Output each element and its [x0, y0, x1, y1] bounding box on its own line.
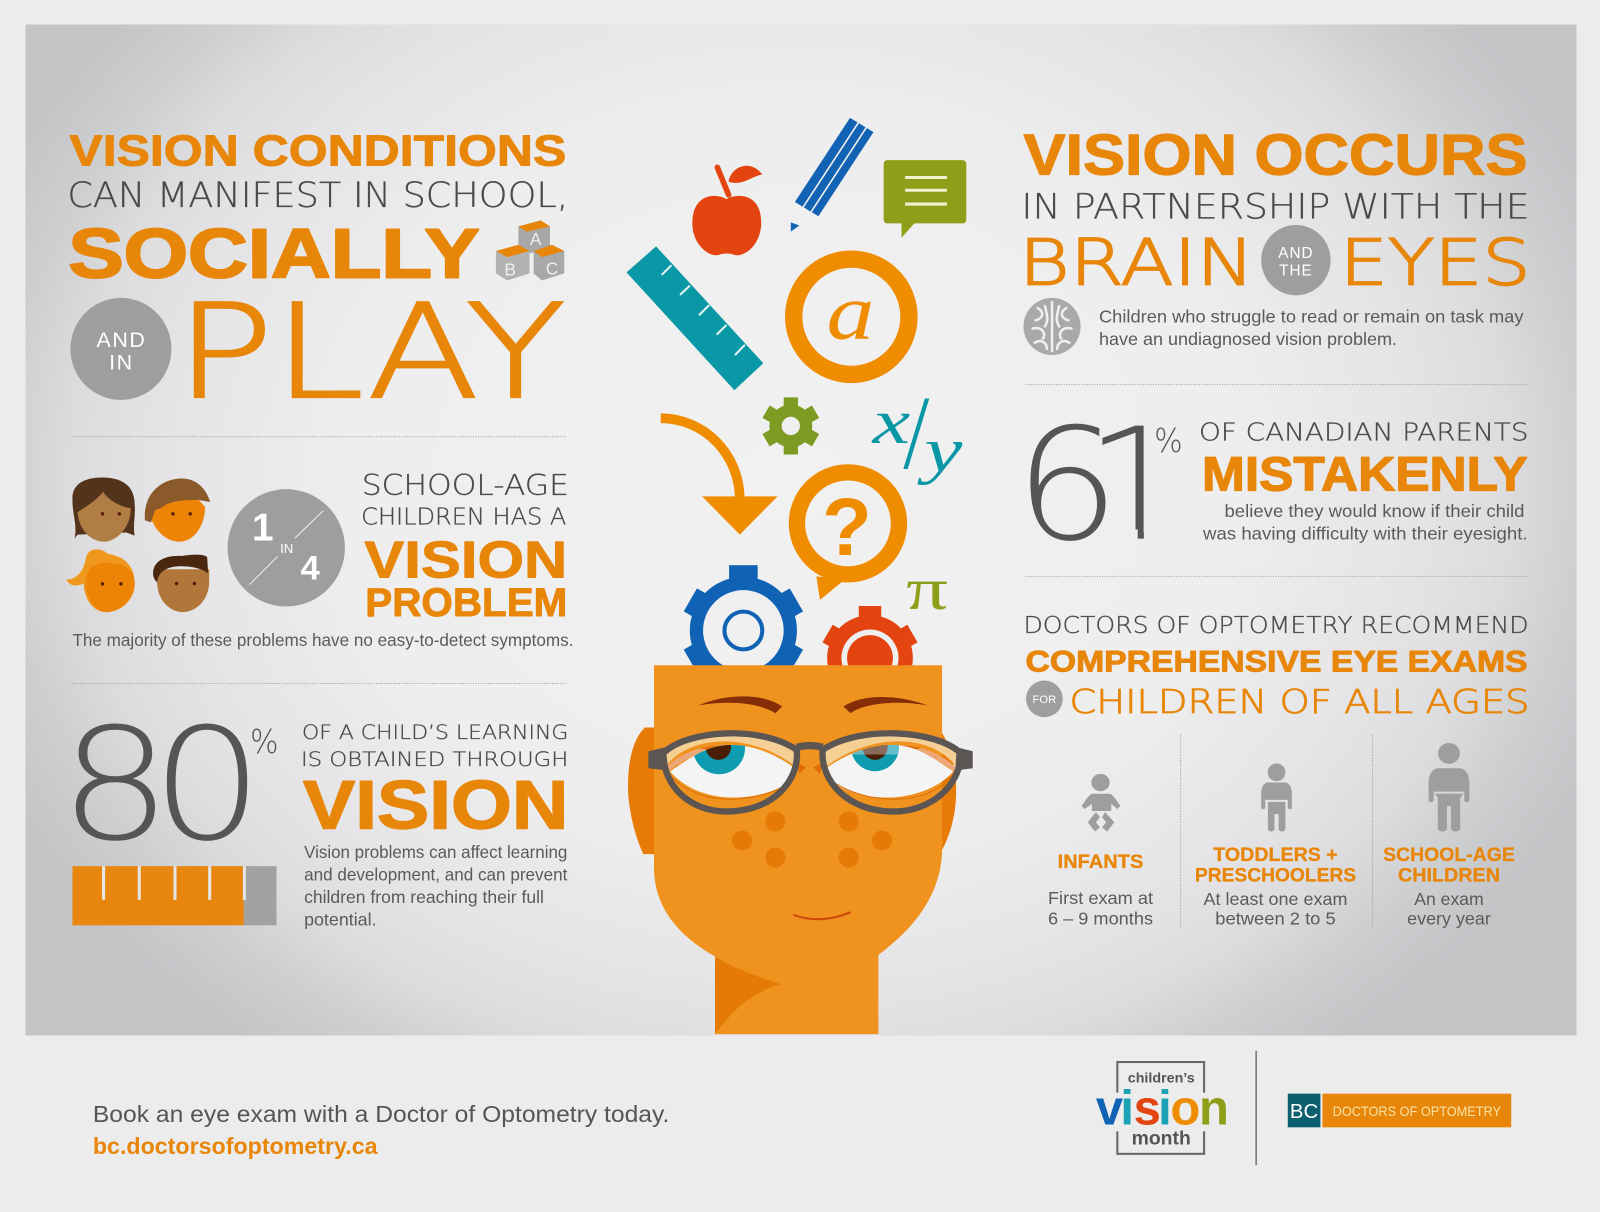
footer: [93, 1051, 1511, 1165]
text: children who struggle: [1099, 306, 1524, 349]
stat: 61 percent: [1030, 424, 1180, 541]
logo: children's vision month: n: [1199, 1081, 1229, 1135]
logo: children's vision month: i: [1158, 1081, 1172, 1135]
column: toddlers and preschoolers: between 2 to 5: [1215, 908, 1336, 928]
icon: green gear: [763, 397, 819, 454]
text: children who struggle: Children who struggle to read or remain on task may: [1099, 306, 1524, 326]
logo: children's vision month: o: [1170, 1081, 1200, 1135]
eyebrows: [698, 696, 928, 713]
icon: ruler: [627, 246, 763, 390]
column: infants: INFANTS: [1058, 851, 1143, 873]
text: school-age children stat: [361, 468, 569, 625]
icon: letter a ring: a: [827, 269, 874, 357]
column: toddlers and preschoolers: At least one exam: [1204, 889, 1347, 909]
text: 80 percent heading: VISION: [303, 767, 568, 843]
logo: children's vision month: [1096, 1062, 1229, 1154]
heading: vision occurs: BRAIN: [1019, 226, 1255, 300]
text: call to action: bc.doctorsofoptometry.ca: [93, 1133, 378, 1159]
text: canadian parents: OF CANADIAN PARENTS: [1199, 418, 1529, 447]
icon: x over y: x: [871, 387, 910, 457]
stat: 80 percent: 80: [59, 696, 264, 876]
badge: and the: [1261, 225, 1331, 295]
stat: 61 percent: %: [1154, 422, 1183, 460]
heading: vision conditions: SOCIALLY: [68, 215, 480, 292]
stat badge: 1 in 4: 1: [252, 507, 274, 550]
heading: doctors recommend: COMPREHENSIVE EYE EXAMS: [1026, 645, 1528, 678]
icon: alphabet blocks: A: [530, 229, 542, 249]
badge: and in: AND: [97, 328, 146, 352]
column: infants: First exam at: [1048, 888, 1153, 908]
icon: blue gear: [684, 565, 803, 677]
icon: x over y: y: [916, 415, 963, 485]
neck shadow: [715, 957, 781, 1034]
badge: for: [1026, 680, 1063, 717]
chart: ruler 80 percent bar: [72, 866, 277, 925]
icon: letter a ring: [794, 259, 909, 374]
text: learning paragraph: potential.: [304, 909, 377, 929]
panel: right column: [1014, 123, 1531, 928]
right eye: [826, 736, 956, 800]
illustration: four children faces: [66, 477, 210, 612]
badge: and the: AND: [1278, 245, 1314, 262]
column: school-age children: CHILDREN: [1398, 864, 1500, 886]
column: school-age children: every year: [1407, 908, 1491, 928]
icon: x over y: [871, 382, 963, 485]
column: toddlers and preschoolers: [1195, 763, 1356, 928]
text: learning paragraph: children from reaching their full: [304, 887, 544, 907]
text: learning paragraph: and development, and can prevent: [304, 864, 568, 884]
logo: BC doctors of optometry: [1288, 1094, 1511, 1127]
badge: for: FOR: [1033, 694, 1056, 706]
icon: pencil: [791, 118, 873, 232]
text: canadian parents: [1199, 418, 1529, 544]
text: school-age children stat: VISION: [364, 531, 567, 589]
illustration: head with glasses: [628, 665, 973, 1034]
column: school-age children: SCHOOL-AGE: [1383, 844, 1515, 866]
icon: brain: [1023, 298, 1081, 355]
column: toddlers and preschoolers: PRESCHOOLERS: [1195, 864, 1356, 886]
face: boy with brown hair: [145, 478, 210, 542]
text: children who struggle: have an undiagnosed vision problem.: [1099, 329, 1397, 349]
heading: doctors recommend: DOCTORS OF OPTOMETRY RECOMMEND: [1023, 613, 1529, 639]
icon: infant: [1082, 774, 1120, 831]
stat badge: 1 in 4: IN: [280, 541, 293, 556]
mouth: [793, 912, 851, 919]
heading: vision occurs: [1019, 123, 1531, 300]
text: canadian parents: MISTAKENLY: [1202, 449, 1528, 502]
text: canadian parents: believe they would know if their child: [1224, 501, 1524, 521]
panel: left column: [59, 126, 573, 929]
left eye: [666, 736, 794, 800]
head shape: [654, 665, 942, 1034]
heading: doctors recommend: [1023, 613, 1530, 721]
stat: 80 percent: %: [250, 723, 279, 761]
heading: vision occurs: VISION OCCURS: [1023, 123, 1528, 187]
face: girl with brown hair: [72, 477, 135, 542]
nose marks: [797, 763, 823, 774]
badge: and in: IN: [109, 350, 134, 374]
text: canadian parents: was having difficulty with their eyesight.: [1202, 524, 1528, 544]
face: boy with dark hair: [153, 555, 209, 612]
logo: children's vision month: children’s: [1128, 1070, 1195, 1086]
freckles: [732, 812, 892, 868]
icon: red gear: [822, 606, 918, 701]
icon: apple: [692, 166, 762, 255]
heading: play: PLAY: [176, 277, 565, 428]
logo: children's vision month: i: [1120, 1081, 1134, 1135]
ears: [628, 728, 956, 854]
icon: pi: π: [906, 556, 948, 622]
icon: question bubble: ?: [822, 482, 872, 573]
logo: BC doctors of optometry: BC: [1290, 1101, 1318, 1123]
logo: children's vision month: s: [1134, 1081, 1161, 1135]
icon: question bubble: [797, 472, 899, 600]
heading: vision conditions: [67, 126, 568, 292]
stat: 61 percent: 61: [1014, 395, 1190, 575]
icon: alphabet blocks: B: [504, 259, 516, 279]
text: school-age children stat: SCHOOL-AGE: [362, 468, 569, 502]
text: 80 percent heading: OF A CHILD’S LEARNING: [302, 721, 568, 744]
illustration: centre school icons and head: [627, 118, 973, 1034]
stat badge: 1 in 4: [228, 489, 345, 607]
text: learning paragraph: [304, 842, 568, 929]
logo: children's vision month: v: [1096, 1081, 1124, 1135]
badge: and the: THE: [1279, 262, 1313, 279]
icon: x over y: /: [902, 382, 931, 482]
column: toddlers and preschoolers: TODDLERS +: [1213, 844, 1338, 866]
text: school-age children stat: PROBLEM: [365, 581, 567, 625]
icon: toddler: [1261, 763, 1292, 831]
icon: alphabet blocks: [496, 220, 564, 281]
text: school-age children stat: CHILDREN HAS A: [361, 504, 566, 530]
face: girl with ponytail: [66, 549, 135, 612]
arrow: curved orange arrow: [661, 418, 778, 535]
text: call to action: [93, 1101, 669, 1159]
stat badge: 1 in 4: 4: [301, 549, 321, 587]
logo: children's vision month: month: [1132, 1128, 1191, 1150]
logo: BC doctors of optometry: DOCTORS OF OPTOMETRY: [1333, 1104, 1501, 1119]
heading: vision occurs: IN PARTNERSHIP WITH THE: [1021, 187, 1530, 227]
column: school-age children: An exam: [1414, 889, 1484, 909]
column: school-age children: [1383, 743, 1515, 928]
text: learning paragraph: Vision problems can affect learning: [304, 842, 567, 862]
column: infants: 6 – 9 months: [1048, 908, 1153, 928]
icon: speech bubble: [884, 160, 966, 238]
text: 80 percent heading: IS OBTAINED THROUGH: [301, 748, 568, 771]
text: call to action: Book an eye exam with a Doctor of Optometry today.: [93, 1101, 669, 1127]
heading: vision conditions: VISION CONDITIONS: [69, 126, 566, 175]
badge: and in: [70, 298, 171, 400]
text: no easy-to-detect symptoms: The majority of these problems have no easy-to-detect symptoms.: [72, 630, 573, 650]
text: 80 percent heading: [301, 721, 568, 843]
column: infants: [1048, 774, 1153, 928]
heading: doctors recommend: CHILDREN OF ALL AGES: [1069, 683, 1530, 721]
heading: vision conditions: CAN MANIFEST IN SCHOOL,: [67, 176, 568, 216]
icon: school-age child: [1429, 743, 1469, 831]
glasses: [648, 733, 973, 812]
heading: vision occurs: EYES: [1340, 226, 1531, 300]
icon: alphabet blocks: C: [546, 258, 558, 278]
